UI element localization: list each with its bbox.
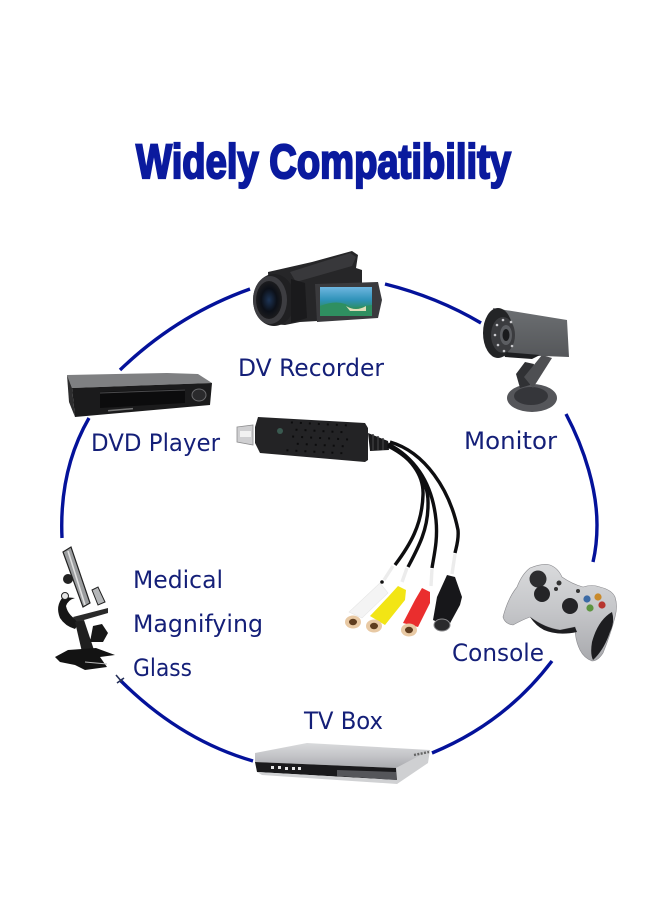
icon: game controller [503, 564, 616, 661]
white cable sleeves [384, 554, 455, 586]
label: Medical Magnifying Glass: Medical [133, 566, 223, 594]
label: DV Recorder: DV Recorder [238, 354, 384, 382]
USB plug [237, 425, 253, 445]
title: Widely Compatibility [136, 136, 511, 189]
label: Monitor: Monitor [464, 427, 557, 455]
white RCA connector [345, 580, 388, 628]
label: Medical Magnifying Glass: Magnifying [133, 610, 263, 638]
label: DVD Player: DVD Player [91, 429, 220, 457]
label: TV Box: TV Box [303, 707, 383, 735]
S-video connector [433, 575, 462, 631]
icon: camcorder [253, 251, 382, 326]
yellow RCA connector [366, 586, 406, 632]
icon: DVD player [67, 373, 212, 417]
label: Console: Console [452, 639, 544, 667]
icon: USB capture dongle with cables [237, 417, 462, 636]
icon: TV box [255, 743, 430, 784]
icon: microscope [55, 547, 115, 670]
red RCA connector [401, 588, 430, 636]
strain relief [368, 433, 389, 451]
flip-out screen [315, 282, 382, 322]
label: Medical Magnifying Glass [133, 566, 263, 682]
icon: security camera [483, 308, 569, 412]
label: Medical Magnifying Glass: Glass [133, 654, 192, 682]
cables [388, 442, 458, 568]
dongle body [255, 417, 368, 462]
circular connection ring [62, 284, 597, 761]
